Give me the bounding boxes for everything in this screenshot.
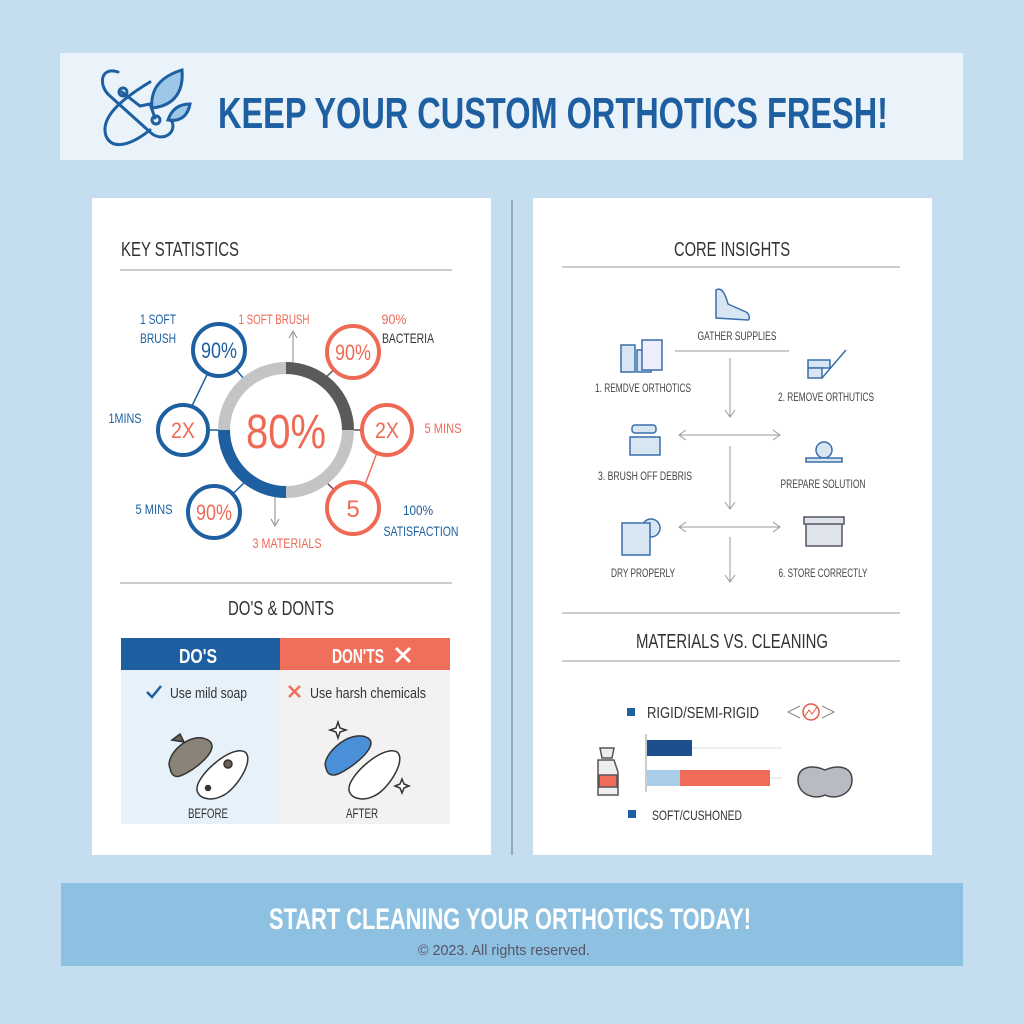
flowchart: cleaning steps: DRY PROPERLY	[611, 566, 675, 580]
heading: core insights: CORE INSIGHTS	[674, 239, 790, 261]
footer copyright: © 2023. All rights reserved.	[418, 942, 590, 959]
chart: ring stats: 1 SOFT	[140, 311, 176, 327]
table: do's and don'ts: Use mild soap	[170, 685, 247, 702]
chart: ring stats: BACTERIA	[382, 330, 434, 346]
flowchart: cleaning steps: GATHER SUPPLIES	[698, 329, 776, 343]
flowchart: cleaning steps: 2. REMOVE ORTHUTICS	[778, 390, 874, 404]
chart: ring stats: 5	[346, 496, 360, 523]
icon: sponge	[798, 767, 852, 797]
chart: ring stats: 1MINS	[108, 410, 142, 426]
chart: ring stats: 90%	[196, 500, 232, 525]
chart: ring stats: 3 MATERIALS	[252, 535, 322, 551]
icon: clean insoles	[325, 722, 409, 799]
chart: ring stats: SATISFACTION	[384, 523, 458, 539]
chart: ring stats: 2X	[375, 418, 399, 443]
flowchart: cleaning steps: 6. STORE CORRECTLY	[778, 566, 868, 580]
heading: do's & donts: DO'S & DONTS	[228, 598, 334, 620]
chart: ring stats: 100%	[403, 502, 433, 518]
chart: ring stats: 90%	[335, 340, 371, 365]
chart: ring stats: 90%	[201, 338, 237, 363]
chart: ring stats: 5 MINS	[424, 420, 462, 436]
flowchart: cleaning steps: PREPARE SOLUTION	[780, 477, 866, 491]
table: do's and don'ts: BEFORE	[188, 805, 228, 821]
panel: core insights	[533, 198, 932, 855]
flowchart: cleaning steps	[595, 289, 874, 582]
chart: ring stats	[108, 311, 462, 551]
chart: ring stats: 2X	[171, 418, 195, 443]
table: do's and don'ts: Use harsh chemicals	[310, 685, 426, 702]
icon: spray bottle	[598, 748, 618, 795]
heading: materials vs cleaning: MATERIALS VS. CLEANING	[636, 631, 828, 653]
table: do's and don'ts: DO'S	[179, 646, 217, 668]
icon: dirty insoles	[169, 734, 248, 799]
bar chart: materials: RIGID/SEMI-RIGID	[647, 705, 759, 722]
flowchart: cleaning steps: 1. REMDVE ORTHOTICS	[595, 381, 691, 395]
flowchart: cleaning steps: 3. BRUSH OFF DEBRIS	[598, 469, 692, 483]
bar chart: materials: SOFT/CUSHONED	[652, 807, 742, 823]
chart: ring stats: 90%	[382, 311, 406, 327]
icon: orthotic leaf logo	[102, 70, 190, 145]
chart: ring stats: BRUSH	[140, 330, 176, 346]
header banner	[60, 53, 963, 160]
footer call to action: START CLEANING YOUR ORTHOTICS TODAY!	[269, 903, 751, 936]
table: do's and don'ts: AFTER	[346, 805, 378, 821]
chart: ring stats: 5 MINS	[136, 501, 172, 517]
panel: key statistics	[92, 198, 491, 855]
chart: ring stats: 1 SOFT BRUSH	[238, 311, 310, 327]
table: do's and don'ts: DON'TS	[332, 646, 384, 668]
heading: key statistics: KEY STATISTICS	[121, 239, 239, 261]
table: do's and don'ts	[121, 638, 450, 824]
chart: ring stats: 80%	[246, 406, 326, 459]
footer banner	[61, 883, 963, 966]
bar chart: materials	[598, 704, 852, 823]
